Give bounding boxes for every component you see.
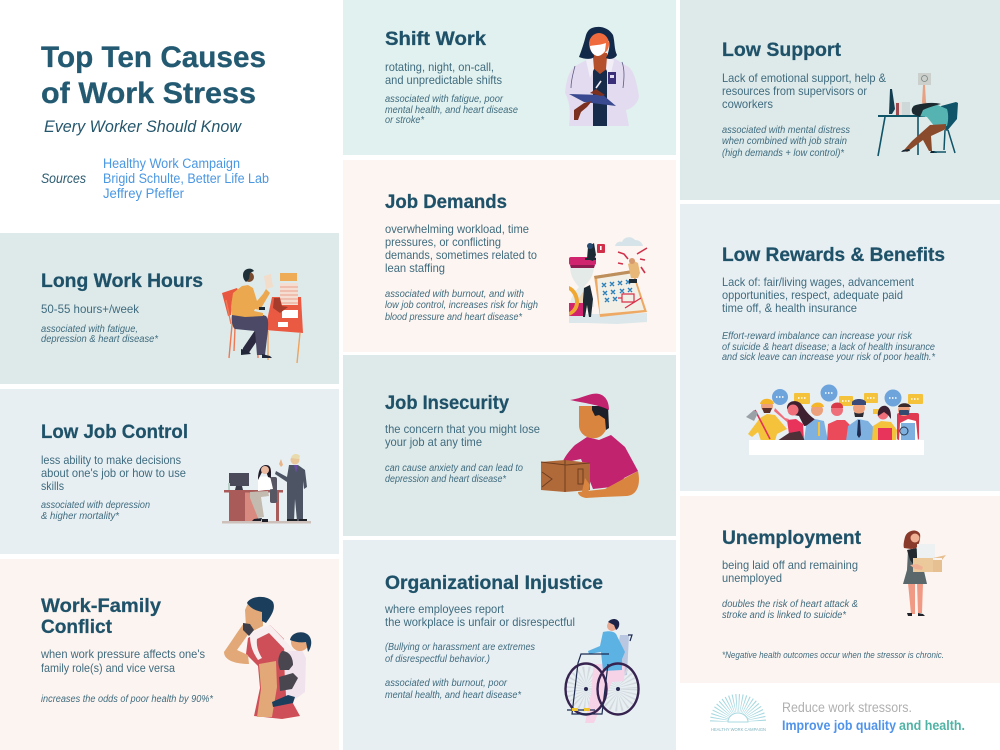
heading: Shift Work — [385, 28, 486, 50]
description — [385, 222, 537, 275]
sources list: Brigid Schulte, Better Life Lab — [103, 171, 269, 186]
health effect: stroke and is linked to suicide* — [722, 610, 847, 621]
heading: Low Job Control — [41, 421, 188, 443]
footnote: *Negative health outcomes occur when the stressor is chronic. — [722, 650, 944, 661]
health effect — [385, 463, 523, 485]
description: pressures, or conflicting — [385, 235, 501, 249]
heading: Conflict — [41, 616, 112, 638]
heading: Organizational Injustice — [385, 572, 603, 594]
sources list: Jeffrey Pfeffer — [103, 186, 184, 201]
health effect — [41, 324, 159, 345]
panel: organizational injustice — [343, 540, 676, 750]
description: the workplace is unfair or disrespectful — [385, 615, 575, 629]
description: opportunities, respect, adequate paid — [722, 288, 903, 302]
description — [385, 422, 540, 449]
white caption strip — [749, 440, 924, 455]
health effect — [41, 500, 150, 522]
health effect: associated with burnout, and with — [385, 289, 524, 300]
health effect: or stroke* — [385, 115, 425, 126]
sources list: Healthy Work Campaign — [103, 156, 240, 171]
heading: Low Support — [722, 39, 841, 61]
health effect: doubles the risk of heart attack & — [722, 599, 858, 610]
description: less ability to make decisions — [41, 453, 181, 467]
icon: woman at desk with standing manager — [222, 454, 311, 524]
description: your job at any time — [385, 435, 482, 449]
health effect: associated with fatigue, poor — [385, 94, 504, 105]
description — [722, 558, 858, 585]
note: of disrespectful behavior.) — [385, 654, 490, 665]
heading: Long Work Hours — [41, 270, 203, 292]
description — [384, 602, 575, 629]
description: where employees report — [384, 602, 505, 616]
health effect: low job control, increases risk for high — [385, 300, 538, 311]
panel: shift work — [343, 0, 676, 155]
panel: job insecurity — [343, 355, 676, 536]
icon: laid-off woman carrying a box — [903, 530, 946, 616]
panel: job demands — [343, 160, 676, 352]
health effect: blood pressure and heart disease* — [385, 312, 523, 323]
tagline — [782, 699, 965, 733]
description: family role(s) and vice versa — [41, 661, 175, 675]
note: (Bullying or harassment are extremes — [385, 642, 535, 653]
title: of Work Stress — [41, 77, 256, 110]
description: skills — [41, 479, 64, 493]
subtitle: Every Worker Should Know — [44, 117, 243, 136]
health effect: depression and heart disease* — [385, 474, 507, 485]
description: rotating, night, on-call, — [385, 60, 494, 74]
health effect: associated with depression — [41, 500, 150, 511]
sources list — [103, 156, 269, 201]
description: unemployed — [722, 571, 782, 585]
health effect: associated with burnout, poor — [385, 678, 508, 689]
health effect: can cause anxiety and can lead to — [385, 463, 523, 474]
health effect: & higher mortality* — [41, 511, 120, 522]
health effect: of suicide & heart disease; a lack of health insurance — [722, 342, 935, 353]
heading: Job Demands — [385, 191, 507, 213]
health effect: and sick leave can increase your risk of poor health.* — [722, 352, 936, 363]
description: being laid off and remaining — [722, 558, 858, 572]
title — [41, 41, 266, 110]
heading: Low Rewards & Benefits — [722, 244, 945, 266]
health effect — [385, 289, 538, 323]
icon: delivery worker holding box — [541, 394, 639, 498]
logo: healthy work campaign — [711, 703, 766, 741]
title: Top Ten Causes — [41, 41, 266, 74]
description: resources from supervisors or — [722, 84, 867, 98]
logo: healthy work campaign: HEALTHY WORK CAMPAIGN — [711, 727, 766, 733]
icon: woman in wheelchair — [566, 619, 638, 723]
description — [722, 71, 886, 111]
description: Lack of: fair/living wages, advancement — [722, 275, 915, 289]
health effect: depression & heart disease* — [41, 334, 159, 345]
description: and unpredictable shifts — [385, 73, 502, 87]
description: when work pressure affects one's — [40, 647, 205, 661]
description: lean staffing — [385, 261, 445, 275]
health effect — [722, 331, 936, 363]
health effect — [722, 599, 858, 621]
description — [40, 647, 205, 675]
tagline: Reduce work stressors. — [782, 699, 912, 715]
panel: unemployment — [680, 496, 1000, 683]
description: demands, sometimes related to — [385, 248, 537, 262]
heading: Work-Family — [41, 595, 161, 617]
description: Lack of emotional support, help & — [722, 71, 886, 85]
panel: long work hours — [0, 233, 339, 384]
description: coworkers — [722, 97, 773, 111]
icon: father on phone carrying child — [224, 597, 311, 719]
description: the concern that you might lose — [385, 422, 540, 436]
panel: low rewards and benefits — [680, 204, 1000, 491]
icon: group of workers with speech bubbles — [746, 384, 924, 455]
panel: low support — [680, 0, 1000, 200]
icon: exhausted worker slumped on desk — [878, 73, 958, 156]
description — [722, 275, 915, 315]
description: 50-55 hours+/week — [41, 302, 140, 316]
health effect: mental health, and heart disease* — [385, 690, 522, 701]
icon: man at desk with paper stack — [222, 269, 303, 363]
tagline: Improve job quality — [782, 717, 896, 733]
health effect — [722, 125, 850, 159]
health effect — [385, 94, 518, 126]
health effect: increases the odds of poor health by 90%* — [41, 694, 214, 705]
heading: Unemployment — [722, 527, 861, 549]
heading: Job Insecurity — [385, 392, 509, 414]
icon: hourglass and calendar — [569, 237, 647, 324]
description: time off, & health insurance — [722, 301, 857, 315]
panel: work-family conflict — [0, 559, 339, 750]
panel: low job control — [0, 389, 339, 554]
health effect: associated with fatigue, — [41, 324, 138, 335]
description — [41, 453, 186, 493]
description: about one's job or how to use — [41, 466, 186, 480]
description: overwhelming workload, time — [385, 222, 529, 236]
health effect: Effort-reward imbalance can increase your risk — [722, 331, 913, 342]
note — [385, 642, 535, 665]
health effect: mental health, and heart disease — [385, 105, 518, 116]
health effect: associated with mental distress — [722, 125, 850, 136]
description — [385, 60, 502, 87]
health effect: (high demands + low control)* — [722, 148, 845, 159]
tagline: and health. — [899, 717, 965, 733]
sources label: Sources — [41, 171, 86, 186]
health effect: when combined with job strain — [722, 136, 847, 147]
health effect — [385, 678, 522, 701]
title block — [41, 41, 269, 201]
heading — [41, 595, 161, 638]
icon: health worker in mask with clipboard — [565, 27, 639, 126]
